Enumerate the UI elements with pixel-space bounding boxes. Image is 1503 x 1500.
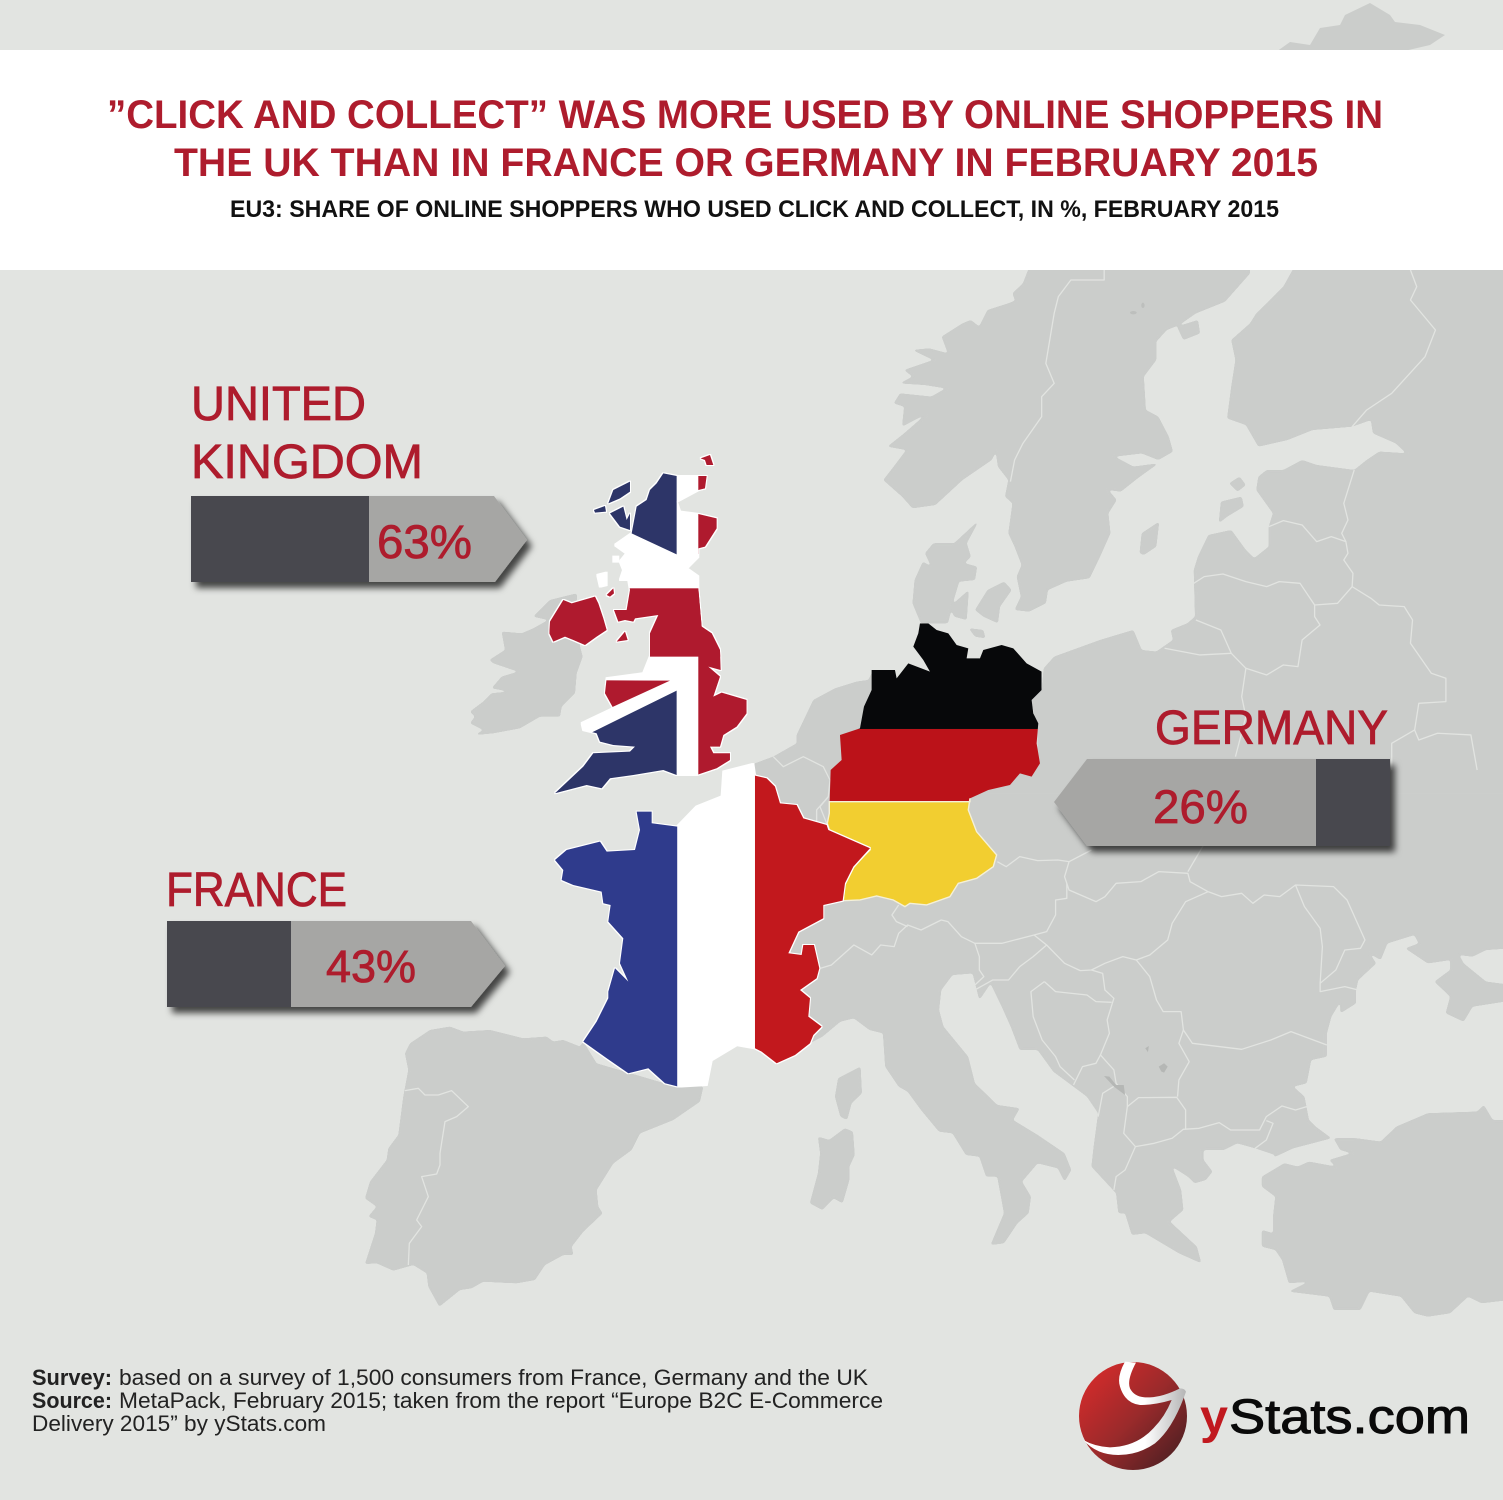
UK bar [191,496,527,582]
title: THE UK THAN IN FRANCE OR GERMANY IN FEBRUARY 2015 [174,141,1318,185]
UK label: UNITED [191,378,366,431]
map: Ireland [470,593,583,735]
subtitle: EU3: SHARE OF ONLINE SHOPPERS WHO USED CLICK AND COLLECT, IN %, FEBRUARY 2015 [230,196,1279,223]
UK bar: 63% [377,515,472,568]
Germany bar: 26% [1153,780,1248,833]
top strip map fragment [1276,3,1445,52]
France bar: 43% [326,941,416,992]
France label: FRANCE [166,864,347,917]
map: Benelux [753,670,877,843]
footnote: MetaPack, February 2015; taken from the report “Europe B2C E-Commerce [119,1388,883,1413]
logo: yStats.com [1079,1362,1470,1470]
Germany label: GERMANY [1155,702,1388,755]
title [107,93,1383,185]
footnote: Survey: [32,1365,112,1390]
footnote: Source: [32,1388,112,1413]
flag map: United Kingdom [548,454,748,794]
footnote: Delivery 2015” by yStats.com [32,1411,326,1436]
France bar [167,921,505,1007]
map: Iberia [365,1027,703,1307]
Germany bar [1054,759,1390,846]
footnote [32,1365,883,1436]
logo: yStats.com: y [1200,1391,1228,1444]
map: central Europe, Italy, Balkans and Turkey [791,793,1503,1317]
UK label: KINGDOM [191,436,423,489]
flag map: Germany [826,623,1042,908]
title: ”CLICK AND COLLECT” WAS MORE USED BY ONLINE SHOPPERS IN [107,93,1383,137]
white title band [0,50,1503,270]
UK label [191,378,423,489]
map: land east of Germany [960,760,1050,810]
footnote: based on a survey of 1,500 consumers from France, Germany and the UK [119,1365,868,1390]
flag map: France [554,763,871,1088]
map: northern Europe [883,257,1503,817]
logo: yStats.com: Stats.com [1229,1391,1470,1444]
